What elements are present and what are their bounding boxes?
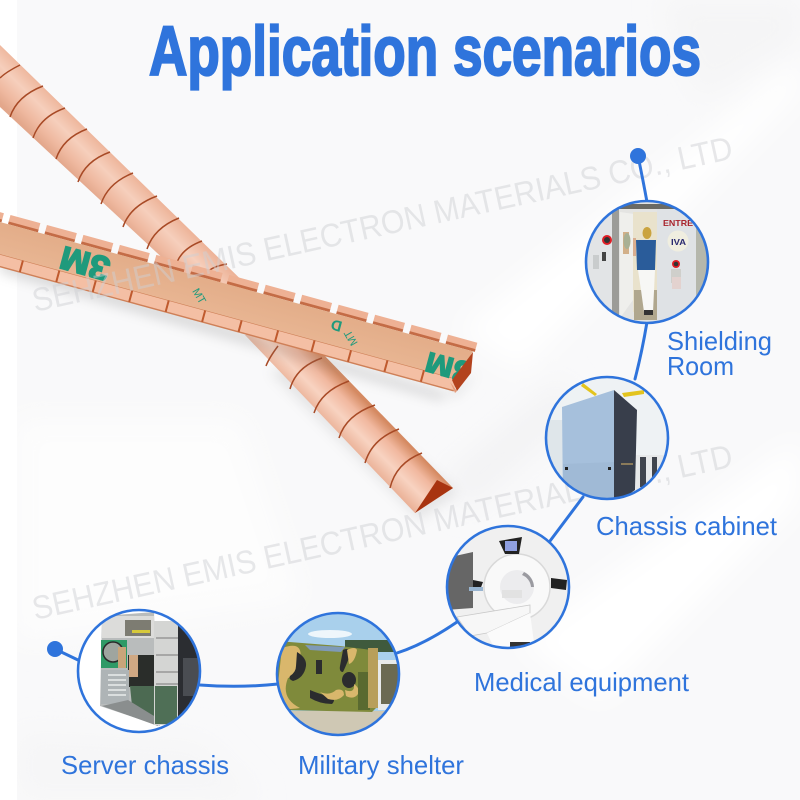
scene: shielding room: [585, 200, 710, 325]
product: copper tube strip: [0, 45, 458, 520]
scene: chassis cabinet: [545, 376, 671, 505]
tape print: 3M: [55, 238, 114, 291]
label: shielding room: Shielding: [667, 326, 772, 356]
product: copper strip with adhesive tape: [0, 208, 478, 400]
label: medical equipment: Medical equipment: [474, 667, 690, 697]
scene: medical equipment: [445, 525, 570, 650]
label: military shelter: Military shelter: [298, 750, 464, 780]
tape print: 3D: [178, 301, 220, 339]
end dot: [47, 641, 63, 657]
label: server chassis: Server chassis: [61, 750, 229, 780]
tape print: MT: [189, 286, 208, 306]
adhesive tape: [0, 217, 473, 381]
label: chassis cabinet: Chassis cabinet: [596, 511, 778, 541]
start dot: [630, 148, 646, 164]
watermark 1: SEHZHEN EMIS ELECTRON MATERIALS CO., LTD: [29, 129, 736, 319]
upper teeth: [0, 208, 476, 346]
watermark 2: SEHZHEN EMIS ELECTRON MATERIALS CO., LTD: [29, 437, 736, 627]
lower flange: [0, 247, 457, 391]
scene: shielding room: IVA: [671, 237, 686, 247]
tape print: MT: [342, 328, 361, 348]
tape print: [59, 246, 466, 380]
tape print: D: [329, 315, 344, 335]
scene: military shelter: [275, 610, 400, 741]
connector timeline: [55, 156, 647, 686]
scene: shielding room: ENTRE: [663, 219, 694, 228]
tape print: 3M: [421, 344, 476, 393]
nurse: [642, 227, 652, 239]
scene: server chassis: [76, 608, 202, 734]
label: shielding room: Room: [667, 351, 734, 381]
